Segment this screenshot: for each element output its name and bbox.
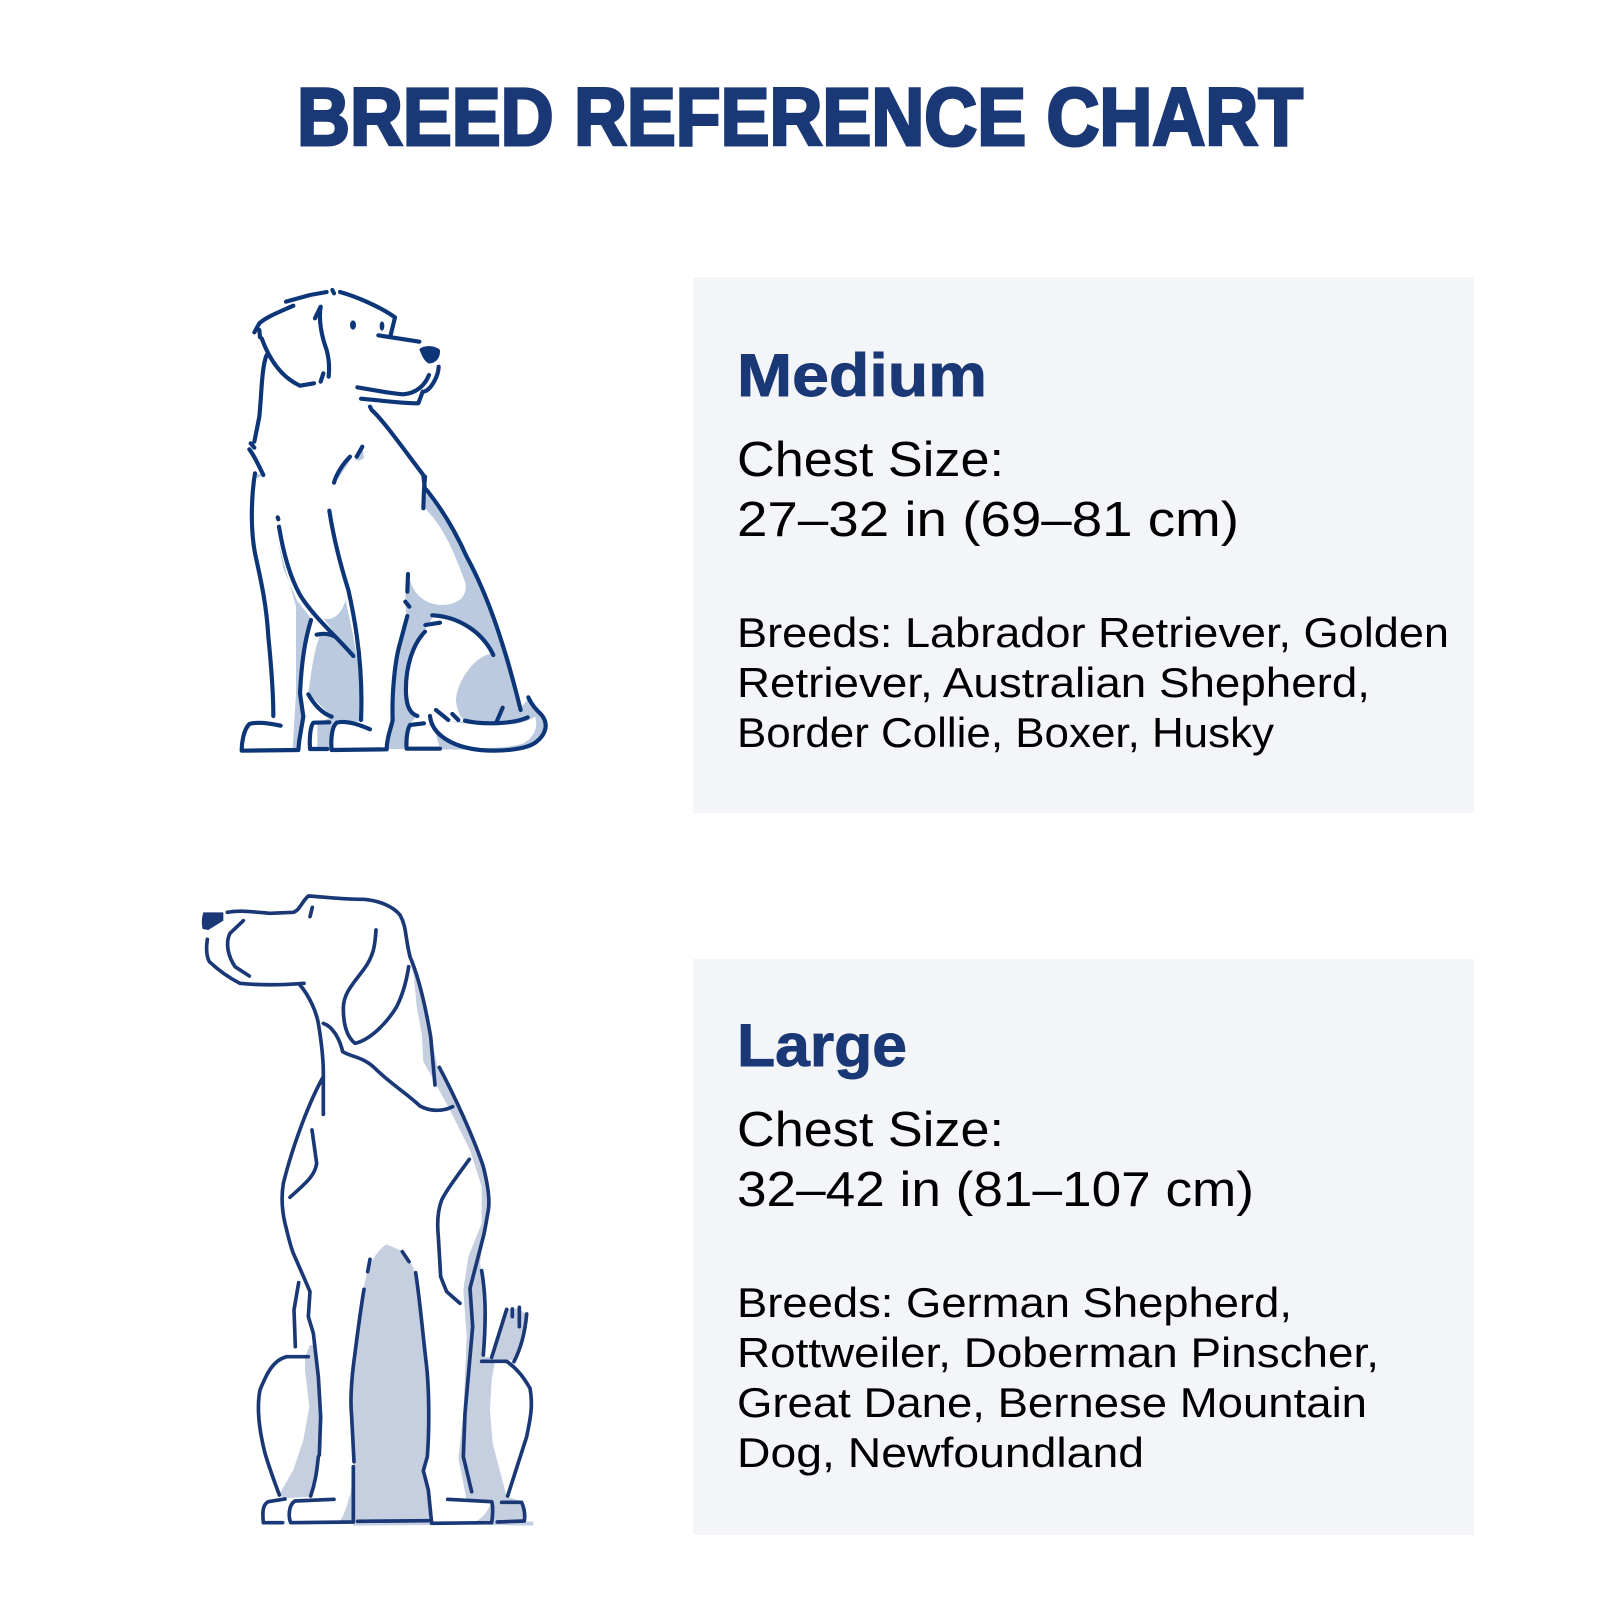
heading: medium: Medium [737, 342, 987, 409]
illustration: large dog [202, 896, 533, 1526]
breeds: large [737, 1279, 1379, 1476]
icon: nose [202, 912, 223, 930]
panel: medium [693, 277, 1474, 813]
shading: large dog [279, 943, 533, 1526]
breeds: medium: Breeds: Labrador Retriever, Golden [737, 609, 1449, 656]
outline: medium dog [242, 290, 546, 751]
icon: nose and eyes [350, 320, 440, 363]
breeds: large: Dog, Newfoundland [737, 1429, 1144, 1476]
breeds: medium: Retriever, Australian Shepherd, [737, 659, 1370, 706]
shading: medium dog [255, 447, 547, 750]
chest size: medium: Chest Size: [737, 432, 1004, 487]
breeds: large: Breeds: German Shepherd, [737, 1279, 1292, 1326]
breeds: medium: Border Collie, Boxer, Husky [737, 709, 1274, 756]
chest size: medium: 27–32 in (69–81 cm) [737, 492, 1239, 547]
title: BREED REFERENCE CHART [297, 72, 1303, 163]
breeds: large: Great Dane, Bernese Mountain [737, 1379, 1367, 1426]
breeds: medium [737, 609, 1449, 756]
breeds: large: Rottweiler, Doberman Pinscher, [737, 1329, 1379, 1376]
chest size: large [737, 1102, 1254, 1217]
panel: large [693, 959, 1474, 1535]
chest size: large: 32–42 in (81–107 cm) [737, 1162, 1254, 1217]
illustration: medium dog [242, 290, 547, 751]
chest size: large: Chest Size: [737, 1102, 1004, 1157]
outline: large dog [207, 896, 531, 1523]
chest size: medium [737, 432, 1239, 547]
heading: large: Large [737, 1012, 907, 1079]
